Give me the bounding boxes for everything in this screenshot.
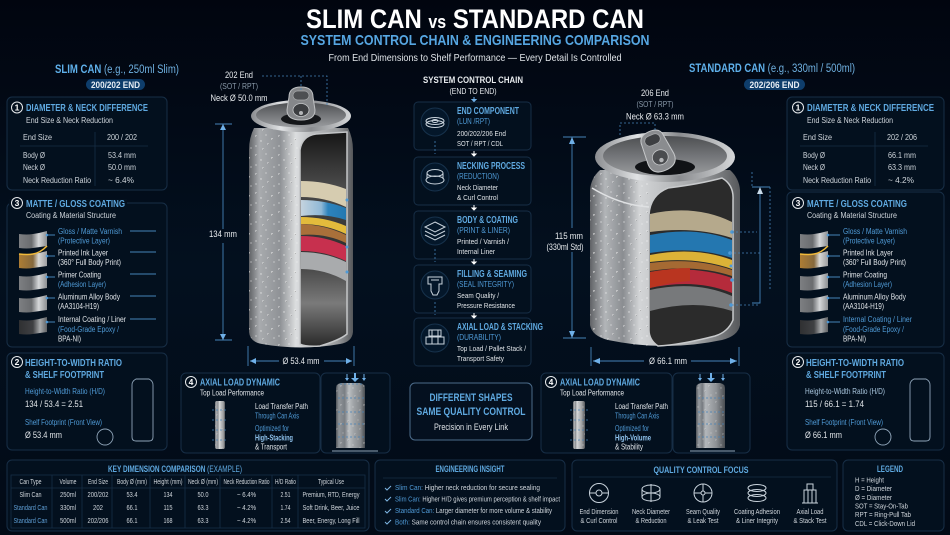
can body xyxy=(590,170,740,346)
step: filling and seaming xyxy=(414,265,531,313)
step: end component: 200/202/206 End xyxy=(457,129,506,138)
panel: quality control focus: & Leak Test xyxy=(688,518,719,525)
panel: matte gloss coating, slim: (Protective Layer) xyxy=(58,236,110,246)
panel: matte gloss coating, standard: Gloss / Matte Varnish xyxy=(843,227,907,236)
table header row: Height (mm) xyxy=(154,479,182,486)
panel: height to width ratio, standard: & SHELF FOOTPRINT xyxy=(806,369,886,381)
standard can dimension labels: Neck Ø 63.3 mm xyxy=(626,112,684,122)
panel: diameter and neck difference, slim: Neck Reduction Ratio xyxy=(23,176,91,185)
standard can dimension labels: (330ml Std) xyxy=(546,242,584,253)
panel: diameter and neck difference, slim: 200 / 202 xyxy=(107,132,137,142)
panel: axial load dynamic, standard: Top Load Performance xyxy=(560,388,624,398)
table header row: Can Type xyxy=(20,479,42,486)
can body xyxy=(249,128,353,348)
standard can header: STANDARD CAN (e.g., 330ml / 500ml) xyxy=(689,63,855,75)
step: filling and seaming: Seam Quality / xyxy=(457,291,500,300)
panel: diameter and neck difference, standard: 66.1 mm xyxy=(888,151,916,160)
panel: matte gloss coating, slim xyxy=(7,198,167,347)
panel: height to width ratio, slim: & SHELF FOOTPRINT xyxy=(25,369,104,381)
panel: engineering insight: Both: Same control chain ensures consistent quality xyxy=(395,520,541,526)
table row: standard can 330ml: 63.3 xyxy=(198,505,209,512)
panel: axial load dynamic, standard: Load Transfer Path xyxy=(615,402,668,411)
table row: standard can 500ml: Standard Can xyxy=(14,518,48,525)
chain heading: SYSTEM CONTROL CHAIN xyxy=(423,75,523,86)
panel: engineering insight xyxy=(375,460,565,531)
table row: standard can 500ml xyxy=(14,518,360,525)
panel: matte gloss coating, standard: (360° Full Body Print) xyxy=(843,258,906,267)
table row: slim can: Premium, RTD, Energy xyxy=(302,492,360,499)
panel: engineering insight: Standard Can: Larger diameter for more volume & stability xyxy=(395,508,552,515)
panel: axial load dynamic, standard: High-Volume xyxy=(615,434,651,442)
slim can dimension labels: Neck Ø 50.0 mm xyxy=(210,93,268,104)
panel: quality control focus: & Stack Test xyxy=(794,518,827,525)
panel: diameter and neck difference, slim: End Size & Neck Reduction xyxy=(26,116,113,125)
panel: matte gloss coating, standard: Printed Ink Layer xyxy=(843,248,893,258)
standard can dimension labels: Ø 66.1 mm xyxy=(649,356,687,367)
callout: different shapes same quality control: DIFFERENT SHAPES xyxy=(430,392,512,404)
table row: slim can xyxy=(20,492,360,499)
slim can header: 200/202 END xyxy=(91,80,140,90)
tagline: From End Dimensions to Shelf Performance — Every Detail Is Controlled xyxy=(328,52,622,64)
panel: quality control focus: & Liner Integrity xyxy=(736,518,778,525)
panel: diameter and neck difference, standard: Body Ø xyxy=(803,151,825,160)
slim can illustration xyxy=(249,76,353,348)
panel: axial load dynamic, standard: AXIAL LOAD DYNAMIC xyxy=(560,376,640,388)
panel: matte gloss coating, standard: (Food-Grade Epoxy / xyxy=(843,325,905,334)
main title: SLIM CAN vs STANDARD CAN xyxy=(306,4,644,34)
panel: matte gloss coating, slim: (Adhesion Layer) xyxy=(58,280,106,289)
icon: coating adhesion xyxy=(748,484,766,502)
table row: slim can: 250ml xyxy=(60,492,76,499)
title block xyxy=(300,4,650,64)
panel: axial load dynamic, standard: Optimized for xyxy=(615,424,649,433)
panel: diameter and neck difference, slim: 1 xyxy=(15,102,20,112)
panel: matte gloss coating, standard: Coating & Material Structure xyxy=(807,211,897,220)
step: end component: (LUN /RPT) xyxy=(457,117,490,126)
slim can dimension labels: 134 mm xyxy=(209,229,237,240)
table row: standard can 330ml: 115 xyxy=(164,505,173,512)
panel: height to width ratio, standard: 115 / 66.1 = 1.74 xyxy=(805,399,864,410)
panel: height to width ratio, standard xyxy=(787,353,944,450)
standard can dimension labels xyxy=(546,88,739,367)
table row: standard can 330ml: 66.1 xyxy=(126,505,138,512)
panel: height to width ratio, standard: Height-to-Width Ratio (H/D) xyxy=(805,387,885,396)
panel: height to width ratio, slim: Height-to-Width Ratio (H/D) xyxy=(25,387,105,396)
panel: matte gloss coating, standard: (Protective Layer) xyxy=(843,236,895,246)
table row: standard can 500ml: 63.3 xyxy=(198,518,209,525)
standard can illustration xyxy=(590,126,770,346)
panel: legend: RPT = Ring-Pull Tab xyxy=(855,510,911,519)
table row: standard can 500ml: 500ml xyxy=(60,518,76,525)
slim can header: SLIM CAN (e.g., 250ml Slim) xyxy=(55,64,179,76)
table row: standard can 500ml: Beer, Energy, Long Fill xyxy=(302,518,360,525)
slim can header xyxy=(55,64,179,90)
panel: quality control focus xyxy=(572,460,837,531)
table header row: Volume xyxy=(60,479,77,486)
panel: diameter and neck difference, standard: Neck Reduction Ratio xyxy=(803,176,871,185)
system control chain: (END TO END) xyxy=(450,86,497,96)
panel: diameter and neck difference, standard: End Size xyxy=(803,132,832,142)
panel: diameter and neck difference, standard: End Size & Neck Reduction xyxy=(807,116,893,125)
step: body and coating: Internal Liner xyxy=(457,247,495,256)
panel: axial load dynamic, slim: Top Load Performance xyxy=(200,388,264,398)
table header row: Neck Reduction Ratio xyxy=(224,479,270,486)
panel: matte gloss coating, standard: 3 xyxy=(796,198,801,208)
table row: standard can 500ml: 202/206 xyxy=(88,518,109,525)
icon: axial load xyxy=(802,484,818,503)
step: axial load and stacking: AXIAL LOAD & STACKING xyxy=(457,321,543,333)
panel: matte gloss coating, standard: BPA-NI) xyxy=(843,334,866,344)
table row: slim can: 2.51 xyxy=(280,492,291,499)
panel: legend: LEGEND xyxy=(877,464,903,474)
table header row: Neck Ø (mm) xyxy=(188,479,218,486)
panel: diameter and neck difference, standard: 63.3 mm xyxy=(888,163,916,172)
panel: matte gloss coating, slim: MATTE / GLOSS COATING xyxy=(26,198,125,210)
step: end component xyxy=(414,102,531,150)
cutaway interior xyxy=(649,178,733,346)
panel: height to width ratio, slim xyxy=(7,353,167,450)
slim can dimension labels: (SOT / RPT) xyxy=(220,81,258,91)
panel: diameter and neck difference, slim: 53.4 mm xyxy=(108,151,136,160)
panel: axial load dynamic, slim: AXIAL LOAD DYNAMIC xyxy=(200,376,280,388)
step: axial load and stacking: (DURABILITY) xyxy=(457,333,501,342)
panel: diameter and neck difference, slim xyxy=(7,97,167,190)
standard can dimension labels: 115 mm xyxy=(555,231,583,242)
slim can dimension labels: Ø 53.4 mm xyxy=(282,356,320,367)
slim can dimension labels xyxy=(209,70,354,367)
table row: standard can 500ml: ~ 4.2% xyxy=(237,518,256,525)
step: body and coating: Printed / Varnish / xyxy=(457,237,510,246)
standard can header: 202/206 END xyxy=(750,80,800,90)
panel: axial load dynamic, slim xyxy=(181,373,390,453)
panel: axial load dynamic, slim: Load Transfer Path xyxy=(255,402,308,411)
panel: engineering insight: ENGINEERING INSIGHT xyxy=(436,464,505,474)
step: necking process: Neck Diameter xyxy=(457,183,498,192)
table row: standard can 330ml: 330ml xyxy=(60,505,76,512)
icon: end dimension xyxy=(589,484,609,502)
step: body and coating xyxy=(414,211,531,259)
panel: axial load dynamic, slim: 4 xyxy=(189,377,194,387)
panel: diameter and neck difference, slim: Body Ø xyxy=(23,151,45,160)
panel: key dimension comparison table xyxy=(7,460,369,531)
step: body and coating: BODY & COATING xyxy=(457,214,518,226)
panel: diameter and neck difference, slim: 50.0 mm xyxy=(108,163,136,172)
panel: matte gloss coating, standard: Aluminum Alloy Body xyxy=(843,292,906,302)
panel: matte gloss coating, slim: Internal Coating / Liner xyxy=(58,315,126,324)
panel: diameter and neck difference, slim: Neck Ø xyxy=(23,163,45,172)
panel: diameter and neck difference, slim: ~ 6.4% xyxy=(108,176,134,185)
table row: slim can: 134 xyxy=(164,492,173,499)
callout: different shapes same quality control: SAME QUALITY CONTROL xyxy=(416,406,526,418)
chain arrows xyxy=(472,97,476,318)
panel: height to width ratio, standard: Ø 66.1 mm xyxy=(805,430,842,441)
system control chain xyxy=(414,75,543,366)
panel: height to width ratio, standard: Shelf Footprint (Front View) xyxy=(805,418,883,427)
panel: legend: CDL = Click-Down Lid xyxy=(855,519,915,528)
step: axial load and stacking: Transport Safety xyxy=(457,354,504,363)
panel: matte gloss coating, slim: Gloss / Matte Varnish xyxy=(58,227,122,236)
panel: matte gloss coating, slim: Primer Coating xyxy=(58,270,101,280)
panel: matte gloss coating, slim: Printed Ink Layer xyxy=(58,248,108,258)
panel: height to width ratio, standard: HEIGHT-TO-WIDTH RATIO xyxy=(806,357,904,369)
table row: slim can: 50.0 xyxy=(198,492,209,499)
icon: seam quality xyxy=(694,484,712,502)
panel: diameter and neck difference, slim: DIAMETER & NECK DIFFERENCE xyxy=(26,102,148,114)
table row: standard can 330ml: 202 xyxy=(93,505,103,512)
panel: matte gloss coating, slim: (Food-Grade Epoxy / xyxy=(58,325,120,334)
panel: legend: Ø = Diameter xyxy=(855,493,892,502)
panel: axial load dynamic, slim: High-Stacking xyxy=(255,434,293,442)
panel: quality control focus: Neck Diameter xyxy=(632,509,671,516)
step: filling and seaming: Pressure Resistance xyxy=(457,301,515,310)
table row: standard can 330ml: ~ 4.2% xyxy=(237,505,256,512)
panel: height to width ratio, slim: 2 xyxy=(15,357,20,367)
panel: legend: H = Height xyxy=(855,476,885,484)
panel: matte gloss coating, slim: Coating & Material Structure xyxy=(26,211,116,220)
panel: axial load dynamic, standard: 4 xyxy=(549,377,554,387)
panel: matte gloss coating, standard: (AA3104-H19) xyxy=(843,302,884,311)
step: end component: SOT / RPT / CDL xyxy=(457,139,503,148)
table row: standard can 330ml: Soft Drink, Beer, Juice xyxy=(302,505,360,512)
panel: height to width ratio, slim: 134 / 53.4 = 2.51 xyxy=(25,399,83,410)
cutaway coating bands xyxy=(650,210,732,311)
panel: matte gloss coating, standard: Primer Coating xyxy=(843,270,887,280)
panel: diameter and neck difference, standard: 202 / 206 xyxy=(887,132,917,142)
table row: standard can 500ml: 168 xyxy=(164,518,173,525)
panel: diameter and neck difference, standard: ~ 4.2% xyxy=(888,176,914,185)
panel: quality control focus: & Curl Control xyxy=(580,518,618,525)
icon: neck diameter xyxy=(642,484,660,502)
standard can dimension labels: 206 End xyxy=(641,88,669,99)
step: necking process xyxy=(414,157,531,205)
panel: height to width ratio, slim: HEIGHT-TO-WIDTH RATIO xyxy=(25,357,122,369)
table row: slim can: 200/202 xyxy=(88,492,109,499)
table row: standard can 330ml: 1.74 xyxy=(280,505,291,512)
panel: quality control focus: Seam Quality xyxy=(686,509,720,516)
panel: quality control focus: End Dimension xyxy=(580,509,619,516)
panel: matte gloss coating, slim: BPA-NI) xyxy=(58,334,81,344)
panel: matte gloss coating, slim: (360° Full Body Print) xyxy=(58,258,121,267)
standard can header xyxy=(689,63,855,90)
table row: slim can: Slim Can xyxy=(20,492,42,499)
subtitle: SYSTEM CONTROL CHAIN & ENGINEERING COMPARISON xyxy=(300,32,650,49)
table row: standard can 330ml: Standard Can xyxy=(14,505,48,512)
step: body and coating: (PRINT & LINER) xyxy=(457,226,510,235)
panel: axial load dynamic, standard: Through Can Axis xyxy=(615,412,659,420)
table row: standard can 330ml xyxy=(14,505,360,512)
table row: standard can 500ml: 2.54 xyxy=(280,518,291,525)
step: axial load and stacking xyxy=(414,318,543,366)
panel: axial load dynamic, slim: & Transport xyxy=(255,442,288,452)
panel: axial load dynamic, standard: & Stability xyxy=(615,442,643,452)
cutaway interior xyxy=(300,132,347,346)
panel: height to width ratio, slim: Ø 53.4 mm xyxy=(25,430,62,441)
can pull tab xyxy=(636,126,679,176)
table header row: H/D Ratio xyxy=(275,479,296,486)
panel: height to width ratio, standard: 2 xyxy=(796,357,801,367)
panel: matte gloss coating, standard: (Adhesion Layer) xyxy=(843,280,892,289)
panel: legend: SOT = Stay-On-Tab xyxy=(855,502,908,510)
step: axial load and stacking: Top Load / Pallet Stack / xyxy=(457,344,527,353)
cutaway coating bands xyxy=(301,181,346,281)
slim can dimension labels: 202 End xyxy=(225,70,253,81)
panel: engineering insight: Slim Can: Higher neck reduction for secure sealing xyxy=(395,485,540,492)
can pull tab xyxy=(287,87,315,120)
panel: axial load dynamic, slim: Optimized for xyxy=(255,424,289,433)
panel: matte gloss coating, slim: 3 xyxy=(15,198,20,208)
step: necking process: & Curl Control xyxy=(457,193,498,202)
panel: quality control focus: Coating Adhesion xyxy=(734,509,780,516)
panel: axial load dynamic, standard xyxy=(541,373,750,453)
panel: quality control focus: & Reduction xyxy=(636,518,667,525)
step: end component: END COMPONENT xyxy=(457,105,519,117)
table row: slim can: ~ 6.4% xyxy=(237,492,256,499)
panel: diameter and neck difference, slim: End Size xyxy=(23,132,52,142)
step: necking process: (REDUCTION) xyxy=(457,172,499,181)
panel: matte gloss coating, slim: Aluminum Alloy Body xyxy=(58,292,120,302)
panel: matte gloss coating, standard: Internal Coating / Liner xyxy=(843,315,912,324)
step: filling and seaming: FILLING & SEAMING xyxy=(457,268,527,280)
panel: quality control focus: Axial Load xyxy=(796,509,824,516)
panel: legend: D = Diameter xyxy=(855,484,892,493)
step: filling and seaming: (SEAL INTEGRITY) xyxy=(457,280,514,289)
callout: different shapes same quality control: Precision in Every Link xyxy=(434,422,508,432)
panel: matte gloss coating, slim: (AA3104-H19) xyxy=(58,302,99,311)
panel: diameter and neck difference, standard: 1 xyxy=(796,102,801,112)
panel: key dimension comparison table: KEY DIMENSION COMPARISON (EXAMPLE) xyxy=(108,464,242,474)
panel: matte gloss coating, standard: MATTE / GLOSS COATING xyxy=(807,198,907,210)
panel: diameter and neck difference, standard xyxy=(787,97,944,190)
can rim xyxy=(251,100,351,132)
callout: different shapes same quality control xyxy=(410,383,532,440)
panel: height to width ratio, slim: Shelf Footprint (Front View) xyxy=(25,418,102,427)
panel: axial load dynamic, slim: Through Can Axis xyxy=(255,412,299,420)
table row: standard can 500ml: 66.1 xyxy=(126,518,138,525)
table header row: Typical Use xyxy=(318,479,344,486)
table header row: Body Ø (mm) xyxy=(117,479,147,486)
table header row: End Size xyxy=(88,479,108,486)
table header row xyxy=(20,479,344,486)
panel: diameter and neck difference, standard: Neck Ø xyxy=(803,163,825,172)
panel: engineering insight: Slim Can: Higher H/D gives premium perception & shelf impact xyxy=(395,496,560,504)
step: necking process: NECKING PROCESS xyxy=(457,160,525,172)
panel: quality control focus: QUALITY CONTROL FOCUS xyxy=(654,465,748,476)
can rim xyxy=(595,132,735,182)
standard can dimension labels: (SOT / RPT) xyxy=(636,99,674,109)
panel: legend xyxy=(843,460,944,531)
table row: slim can: 53.4 xyxy=(126,492,138,499)
panel: matte gloss coating, standard xyxy=(787,192,944,347)
